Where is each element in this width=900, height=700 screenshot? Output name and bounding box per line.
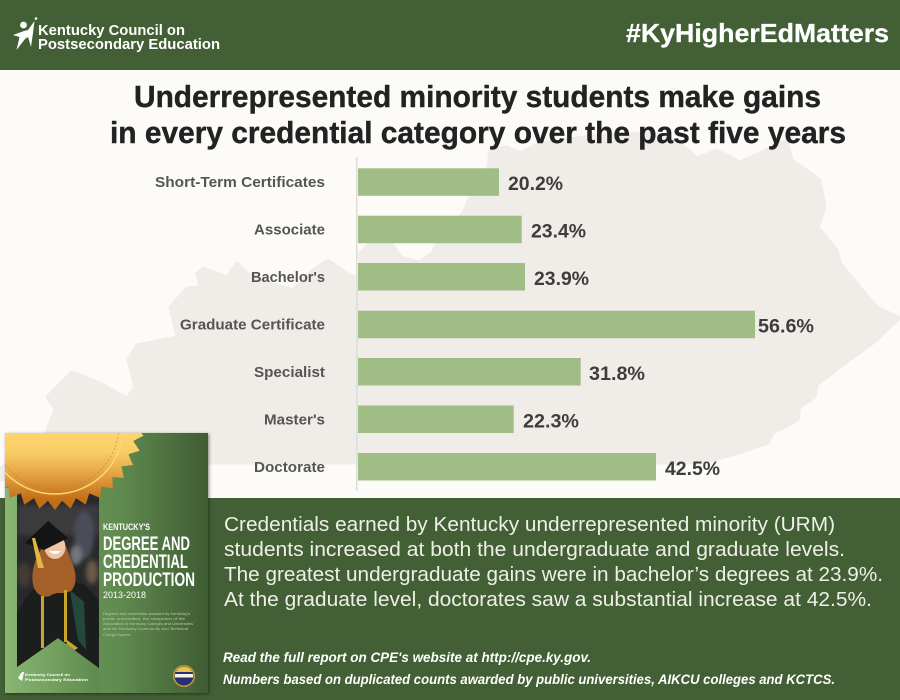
row: Associate: Associate [254,222,325,238]
row: Graduate Certificate: Graduate Certificate [180,316,325,334]
row: Associate [254,216,586,243]
cover description: public universities, the campuses of the [103,617,185,621]
summary paragraph: The greatest undergraduate gains were in bachelor’s degrees at 23.9%. [224,564,883,586]
cover headline [103,522,195,601]
cover description [103,612,193,637]
title [110,79,846,150]
cover headline: KENTUCKY'S [103,522,150,533]
logo wordmark: Kentucky Council on [38,23,185,39]
row: Bachelor's: Bachelor's [251,269,325,286]
summary paragraph: Credentials earned by Kentucky underrepresented minority (URM) [224,514,835,536]
source notes [223,649,835,687]
header band [0,0,900,70]
row: Bachelor's [251,263,589,290]
row: Graduate Certificate: 56.6% [758,316,814,338]
row: Short-Term Certificates: 20.2% [508,173,563,195]
summary paragraph: At the graduate level, doctorates saw a substantial increase at 42.5%. [224,589,872,611]
gold stoles [41,596,44,648]
face [44,540,66,559]
row: Associate: 23.4% [531,220,586,242]
green ribbon wedge [5,488,62,693]
title: in every credential category over the past five years [110,115,846,150]
report cover [4,432,212,696]
graduate photo [17,490,99,670]
bottom panel [0,498,900,700]
cover logo: Postsecondary Education [25,677,89,682]
tassel [32,538,44,568]
cover headline: DEGREE AND [103,534,190,555]
row: Specialist: 31.8% [589,363,645,385]
cover headline: PRODUCTION [103,570,195,591]
row: Doctorate: 42.5% [665,458,720,480]
title: Underrepresented minority students make gains [134,79,821,114]
cover logo: Kentucky Council on [25,672,71,677]
cover description: Association of Kentucky Colleges and Universities [103,622,193,626]
logo wordmark: Postsecondary Education [38,37,220,53]
cover seal [173,665,195,687]
row: Doctorate: Doctorate [254,459,325,476]
source notes: Numbers based on duplicated counts awarded by public universities, AIKCU colleges and KCTCS. [223,671,835,687]
row: Doctorate [254,453,720,480]
bar chart [155,157,814,491]
gown [17,580,99,670]
row: Short-Term Certificates: Short-Term Certificates [155,174,325,191]
summary paragraph [224,514,883,611]
gold medal [5,433,144,510]
row: Master's: 22.3% [523,410,579,432]
row: Bachelor's: 23.9% [534,268,589,290]
cap [25,521,68,550]
cover description: Degrees and credentials awarded by Kentucky's [103,612,190,616]
hair [32,546,76,597]
row: Master's [264,406,579,433]
cover logo [18,672,89,682]
cover description: and the Kentucky Community and Technical [103,627,188,631]
source notes: Read the full report on CPE's website at http://cpe.ky.gov. [223,649,591,665]
row: Graduate Certificate [180,311,814,338]
cover description: College System. [103,633,131,637]
row: Specialist [254,358,645,386]
hashtag: #KyHigherEdMatters [626,18,889,48]
summary paragraph: students increased at both the undergraduate and graduate levels. [224,539,845,561]
cover headline: CREDENTIAL [103,552,188,573]
row: Short-Term Certificates [155,168,563,196]
row: Specialist: Specialist [254,364,325,381]
background map of Kentucky [0,133,900,480]
logo wordmark [38,23,220,53]
icon: CPE reaching figure logo [13,17,37,50]
cover headline: 2013-2018 [103,590,146,601]
row: Master's: Master's [264,412,325,428]
